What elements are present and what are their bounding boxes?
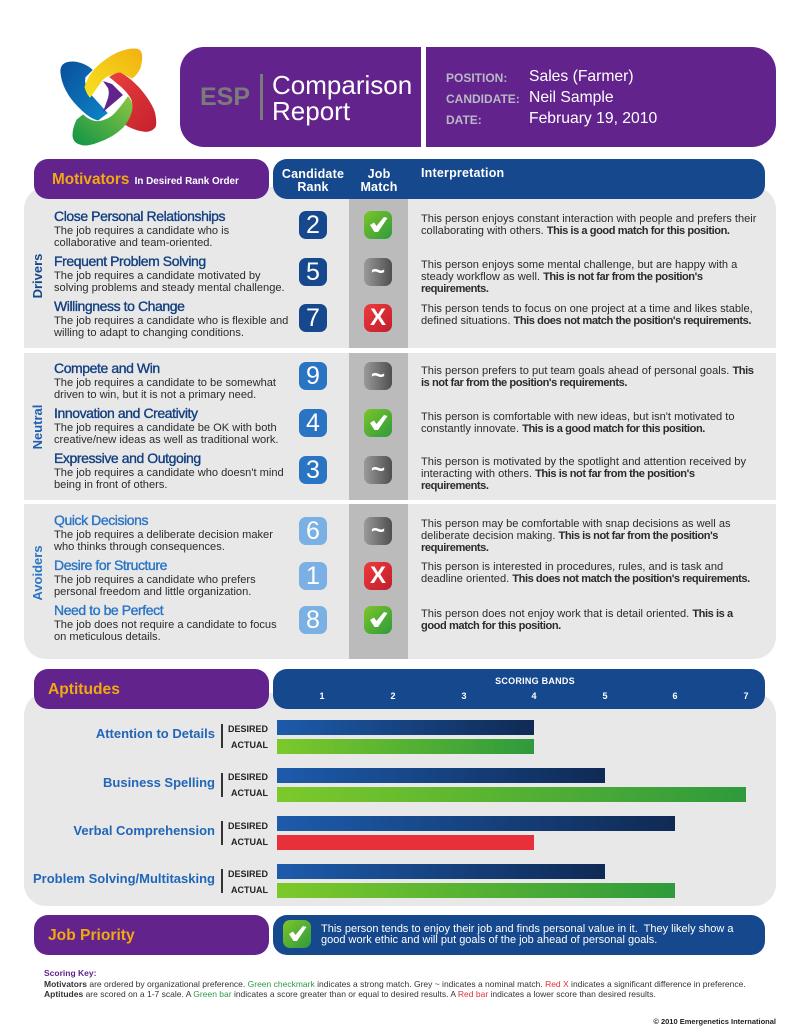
motivator: compete and win: Compete and Win <box>54 360 160 376</box>
rank 8: 8 <box>306 606 320 634</box>
motivator: willingness to change: The job requires a candidate who is flexible and <box>54 315 288 327</box>
interpretation 5 <box>421 411 735 435</box>
desired and actual labels: DESIRED <box>228 724 268 734</box>
match: x <box>364 562 392 590</box>
date: DATE: <box>446 113 482 127</box>
interpretation 5: constantly innovate. This is a good match for this position. <box>421 423 705 435</box>
logo <box>60 48 156 146</box>
job priority text: good work ethic and will put goals of the job ahead of personal goals. <box>321 934 657 946</box>
column: candidate rank <box>282 167 344 194</box>
match: check <box>364 606 392 634</box>
motivator: compete and win: driven to win, but it is not a primary need. <box>54 388 256 400</box>
desired and actual labels: DESIRED <box>228 869 268 879</box>
interpretation 6: requirements. <box>421 480 489 492</box>
motivator: willingness to change <box>54 298 288 338</box>
header: candidate details panel <box>426 47 776 147</box>
motivator: willingness to change: willing to adapt to changing conditions. <box>54 326 244 338</box>
desired and actual labels: ACTUAL <box>231 837 268 847</box>
candidate <box>446 89 614 106</box>
match: x: X <box>370 562 386 589</box>
motivator: compete and win <box>54 360 276 400</box>
scale 3: 3 <box>461 691 466 701</box>
column: job match: Job <box>368 167 390 181</box>
scale 6: 6 <box>672 691 678 701</box>
icon: check <box>283 920 311 948</box>
rank 7 <box>299 304 327 332</box>
interpretation 7: deliberate decision making. This is not far from the position's <box>421 530 718 542</box>
motivator: expressive and outgoing: Expressive and Outgoing <box>54 450 201 466</box>
motivator: innovation and creativity: creative/new ideas as well as traditional work. <box>54 434 278 446</box>
interpretation 8: deadline oriented. This does not match the position's requirements. <box>421 573 750 585</box>
copyright: © 2010 Emergenetics International <box>653 1017 776 1026</box>
bar: actual <box>277 835 534 850</box>
bar: desired <box>277 864 605 879</box>
motivator: frequent problem solving <box>54 253 285 294</box>
motivator: innovation and creativity: The job requires a candidate be OK with both <box>54 422 277 434</box>
motivator: need to be perfect <box>54 602 277 642</box>
heading: job priority <box>34 915 269 955</box>
panel: avoiders <box>24 504 776 659</box>
desired and actual labels: DESIRED <box>228 821 268 831</box>
match: tilde <box>364 258 392 286</box>
interpretation 2 <box>421 259 738 295</box>
rank 4: 4 <box>306 409 320 437</box>
heading: motivators <box>34 159 269 199</box>
panel: neutral <box>24 353 776 500</box>
aptitude: business spelling: Business Spelling <box>103 775 215 790</box>
scale 2: 2 <box>390 691 396 701</box>
motivator: desire for structure: personal freedom and little organization. <box>54 586 251 598</box>
match: tilde: ~ <box>371 362 385 389</box>
scale 7: 7 <box>743 691 748 701</box>
interpretation 3: defined situations. This does not match the position's requirements. <box>421 315 751 327</box>
rank 1: 1 <box>306 562 320 590</box>
match: tilde: ~ <box>371 517 385 544</box>
motivator: desire for structure: The job requires a candidate who prefers <box>54 574 256 586</box>
interpretation 6: interacting with others. This is not far from the position's <box>421 468 695 480</box>
motivator: frequent problem solving: Frequent Problem Solving <box>54 253 206 269</box>
table header <box>273 159 765 199</box>
scoring bands header <box>273 669 765 709</box>
ESP label: ESP <box>200 83 250 111</box>
scoring bands title: SCORING BANDS <box>495 676 575 686</box>
interpretation 4: This person prefers to put team goals ahead of personal goals. This <box>421 365 753 377</box>
motivator: need to be perfect: Need to be Perfect <box>54 602 163 618</box>
scoring key <box>44 968 746 999</box>
heading: aptitudes: Aptitudes <box>48 681 120 698</box>
interpretation 7: requirements. <box>421 542 489 554</box>
match: tilde: ~ <box>371 258 385 285</box>
title divider <box>260 74 263 120</box>
motivator: need to be perfect: The job does not require a candidate to focus <box>54 619 277 631</box>
bar: desired <box>277 768 605 783</box>
date: February 19, 2010 <box>529 110 657 127</box>
job match column: neutral <box>349 353 408 500</box>
match: x <box>364 304 392 332</box>
desired and actual labels: ACTUAL <box>231 740 268 750</box>
rank 7: 7 <box>306 304 320 332</box>
label: avoiders: Avoiders <box>30 545 45 601</box>
column: job match: Match <box>360 180 398 194</box>
interpretation 8 <box>421 561 750 585</box>
desired and actual labels <box>228 724 268 750</box>
header: report title panel <box>180 47 421 147</box>
motivator: innovation and creativity <box>54 405 278 446</box>
motivator: close personal relationships: collaborative and team-oriented. <box>54 236 212 248</box>
motivator: expressive and outgoing: being in front of others. <box>54 478 167 490</box>
divider <box>221 773 222 797</box>
match: tilde <box>364 517 392 545</box>
aptitude: problem solving: Problem Solving/Multitasking <box>33 871 215 886</box>
motivator: desire for structure: Desire for Structure <box>54 557 167 573</box>
motivator: quick decisions: The job requires a deliberate decision maker <box>54 529 273 541</box>
motivator: compete and win: The job requires a candidate to be somewhat <box>54 377 276 389</box>
rank 9: 9 <box>306 362 320 390</box>
rank 9 <box>299 362 327 390</box>
candidate: CANDIDATE: <box>446 92 520 106</box>
divider <box>221 821 222 845</box>
report title: Report <box>272 96 350 126</box>
bar: actual <box>277 787 746 802</box>
rank 2: 2 <box>306 211 320 239</box>
desired and actual labels <box>228 869 268 895</box>
label: neutral: Neutral <box>30 405 45 449</box>
interpretation 2: steady workflow as well. This is not far from the position's <box>421 271 703 283</box>
interpretation 6: This person is motivated by the spotlight and attention received by <box>421 456 746 468</box>
bar: actual <box>277 883 675 898</box>
motivator: willingness to change: Willingness to Change <box>54 298 184 314</box>
divider <box>221 724 222 748</box>
motivator: quick decisions: Quick Decisions <box>54 512 148 528</box>
column: candidate rank: Candidate <box>282 167 344 181</box>
heading: motivators: Motivators In Desired Rank Order <box>52 171 239 188</box>
interpretation 3: This person tends to focus on one project at a time and likes stable, <box>421 303 753 315</box>
bar: desired <box>277 720 534 735</box>
rank 5 <box>299 258 327 286</box>
interpretation 3 <box>421 303 753 327</box>
scoring key: Motivators are ordered by organizational preference. Green checkmark indicates a strong match. Grey ~ indicates a nominal match. Red X indicates a significant difference in preference. <box>44 978 746 988</box>
motivator: expressive and outgoing: The job requires a candidate who doesn't mind <box>54 467 284 479</box>
heading: job priority: Job Priority <box>48 927 135 944</box>
scale 4: 4 <box>531 691 536 701</box>
job match column: drivers <box>349 199 408 348</box>
aptitude: verbal comprehension: Verbal Comprehension <box>73 823 215 838</box>
interpretation 4: is not far from the position's requirements. <box>421 377 627 389</box>
motivator: frequent problem solving: The job requires a candidate motivated by <box>54 270 261 282</box>
bar: desired <box>277 816 675 831</box>
match: tilde <box>364 456 392 484</box>
desired and actual labels: ACTUAL <box>231 788 268 798</box>
match: tilde: ~ <box>371 456 385 483</box>
job priority panel <box>273 915 765 955</box>
rank 2 <box>299 211 327 239</box>
match: check <box>364 409 392 437</box>
report title: Comparison <box>272 70 412 100</box>
motivator: expressive and outgoing <box>54 450 284 490</box>
motivator: close personal relationships: The job requires a candidate who is <box>54 225 229 237</box>
rank 6: 6 <box>306 517 320 545</box>
motivator: need to be perfect: on meticulous details. <box>54 630 161 642</box>
desired and actual labels: DESIRED <box>228 772 268 782</box>
interpretation 9 <box>421 608 734 632</box>
interpretation 9: good match for this position. <box>421 620 561 632</box>
motivator: desire for structure <box>54 557 256 598</box>
rank 3: 3 <box>306 456 320 484</box>
scale 1: 1 <box>319 691 324 701</box>
interpretation 1 <box>421 213 756 237</box>
aptitude: attention to details: Attention to Details <box>96 726 215 741</box>
report title <box>272 70 412 126</box>
divider <box>221 869 222 893</box>
desired and actual labels: ACTUAL <box>231 885 268 895</box>
interpretation 7: This person may be comfortable with snap decisions as well as <box>421 518 731 530</box>
rank 6 <box>299 517 327 545</box>
rank 8 <box>299 606 327 634</box>
motivator: quick decisions: who thinks through consequences. <box>54 540 225 552</box>
column: candidate rank: Rank <box>297 180 329 194</box>
heading: aptitudes <box>34 669 269 709</box>
interpretation 6 <box>421 456 746 492</box>
column: interpretation: Interpretation <box>421 166 504 180</box>
bar: actual <box>277 739 534 754</box>
motivator: close personal relationships <box>54 208 229 248</box>
interpretation 5: This person is comfortable with new ideas, but isn't motivated to <box>421 411 735 423</box>
interpretation 2: requirements. <box>421 283 489 295</box>
panel: drivers <box>24 187 776 348</box>
interpretation 1: collaborating with others. This is a good match for this position. <box>421 225 730 237</box>
interpretation 1: This person enjoys constant interaction with people and prefers their <box>421 213 756 225</box>
position <box>446 68 634 85</box>
motivator: close personal relationships: Close Personal Relationships <box>54 208 225 224</box>
interpretation 8: This person is interested in procedures, rules, and is task and <box>421 561 723 573</box>
date <box>446 110 657 127</box>
job priority text <box>321 922 734 946</box>
match: tilde <box>364 362 392 390</box>
interpretation 4 <box>421 365 754 389</box>
motivator: innovation and creativity: Innovation and Creativity <box>54 405 198 421</box>
match: x: X <box>370 304 386 331</box>
rank 4 <box>299 409 327 437</box>
interpretation 9: This person does not enjoy work that is detail oriented. This is a <box>421 608 733 620</box>
job match column: avoiders <box>349 504 408 659</box>
match: check <box>364 211 392 239</box>
rank 3 <box>299 456 327 484</box>
scoring key: Aptitudes are scored on a 1-7 scale. A Green bar indicates a score greater than or equal to desired results. A Red bar indicates a lower score than desired results. <box>44 989 656 999</box>
interpretation 7 <box>421 518 731 554</box>
panel: aptitudes <box>24 693 776 906</box>
scoring key: Scoring Key: <box>44 968 96 978</box>
label: drivers: Drivers <box>30 254 45 298</box>
position: POSITION: <box>446 71 507 85</box>
desired and actual labels <box>228 821 268 847</box>
position: Sales (Farmer) <box>529 68 634 85</box>
rank 5: 5 <box>306 258 320 286</box>
motivator: frequent problem solving: solving problems and steady mental challenge. <box>54 282 285 294</box>
desired and actual labels <box>228 772 268 798</box>
motivator: quick decisions <box>54 512 273 552</box>
scale 5: 5 <box>602 691 608 701</box>
column: job match <box>360 167 398 194</box>
rank 1 <box>299 562 327 590</box>
candidate: Neil Sample <box>529 89 614 106</box>
interpretation 2: This person enjoys some mental challenge, but are happy with a <box>421 259 737 271</box>
job priority text: This person tends to enjoy their job and finds personal value in it. They likely show a <box>321 922 734 934</box>
